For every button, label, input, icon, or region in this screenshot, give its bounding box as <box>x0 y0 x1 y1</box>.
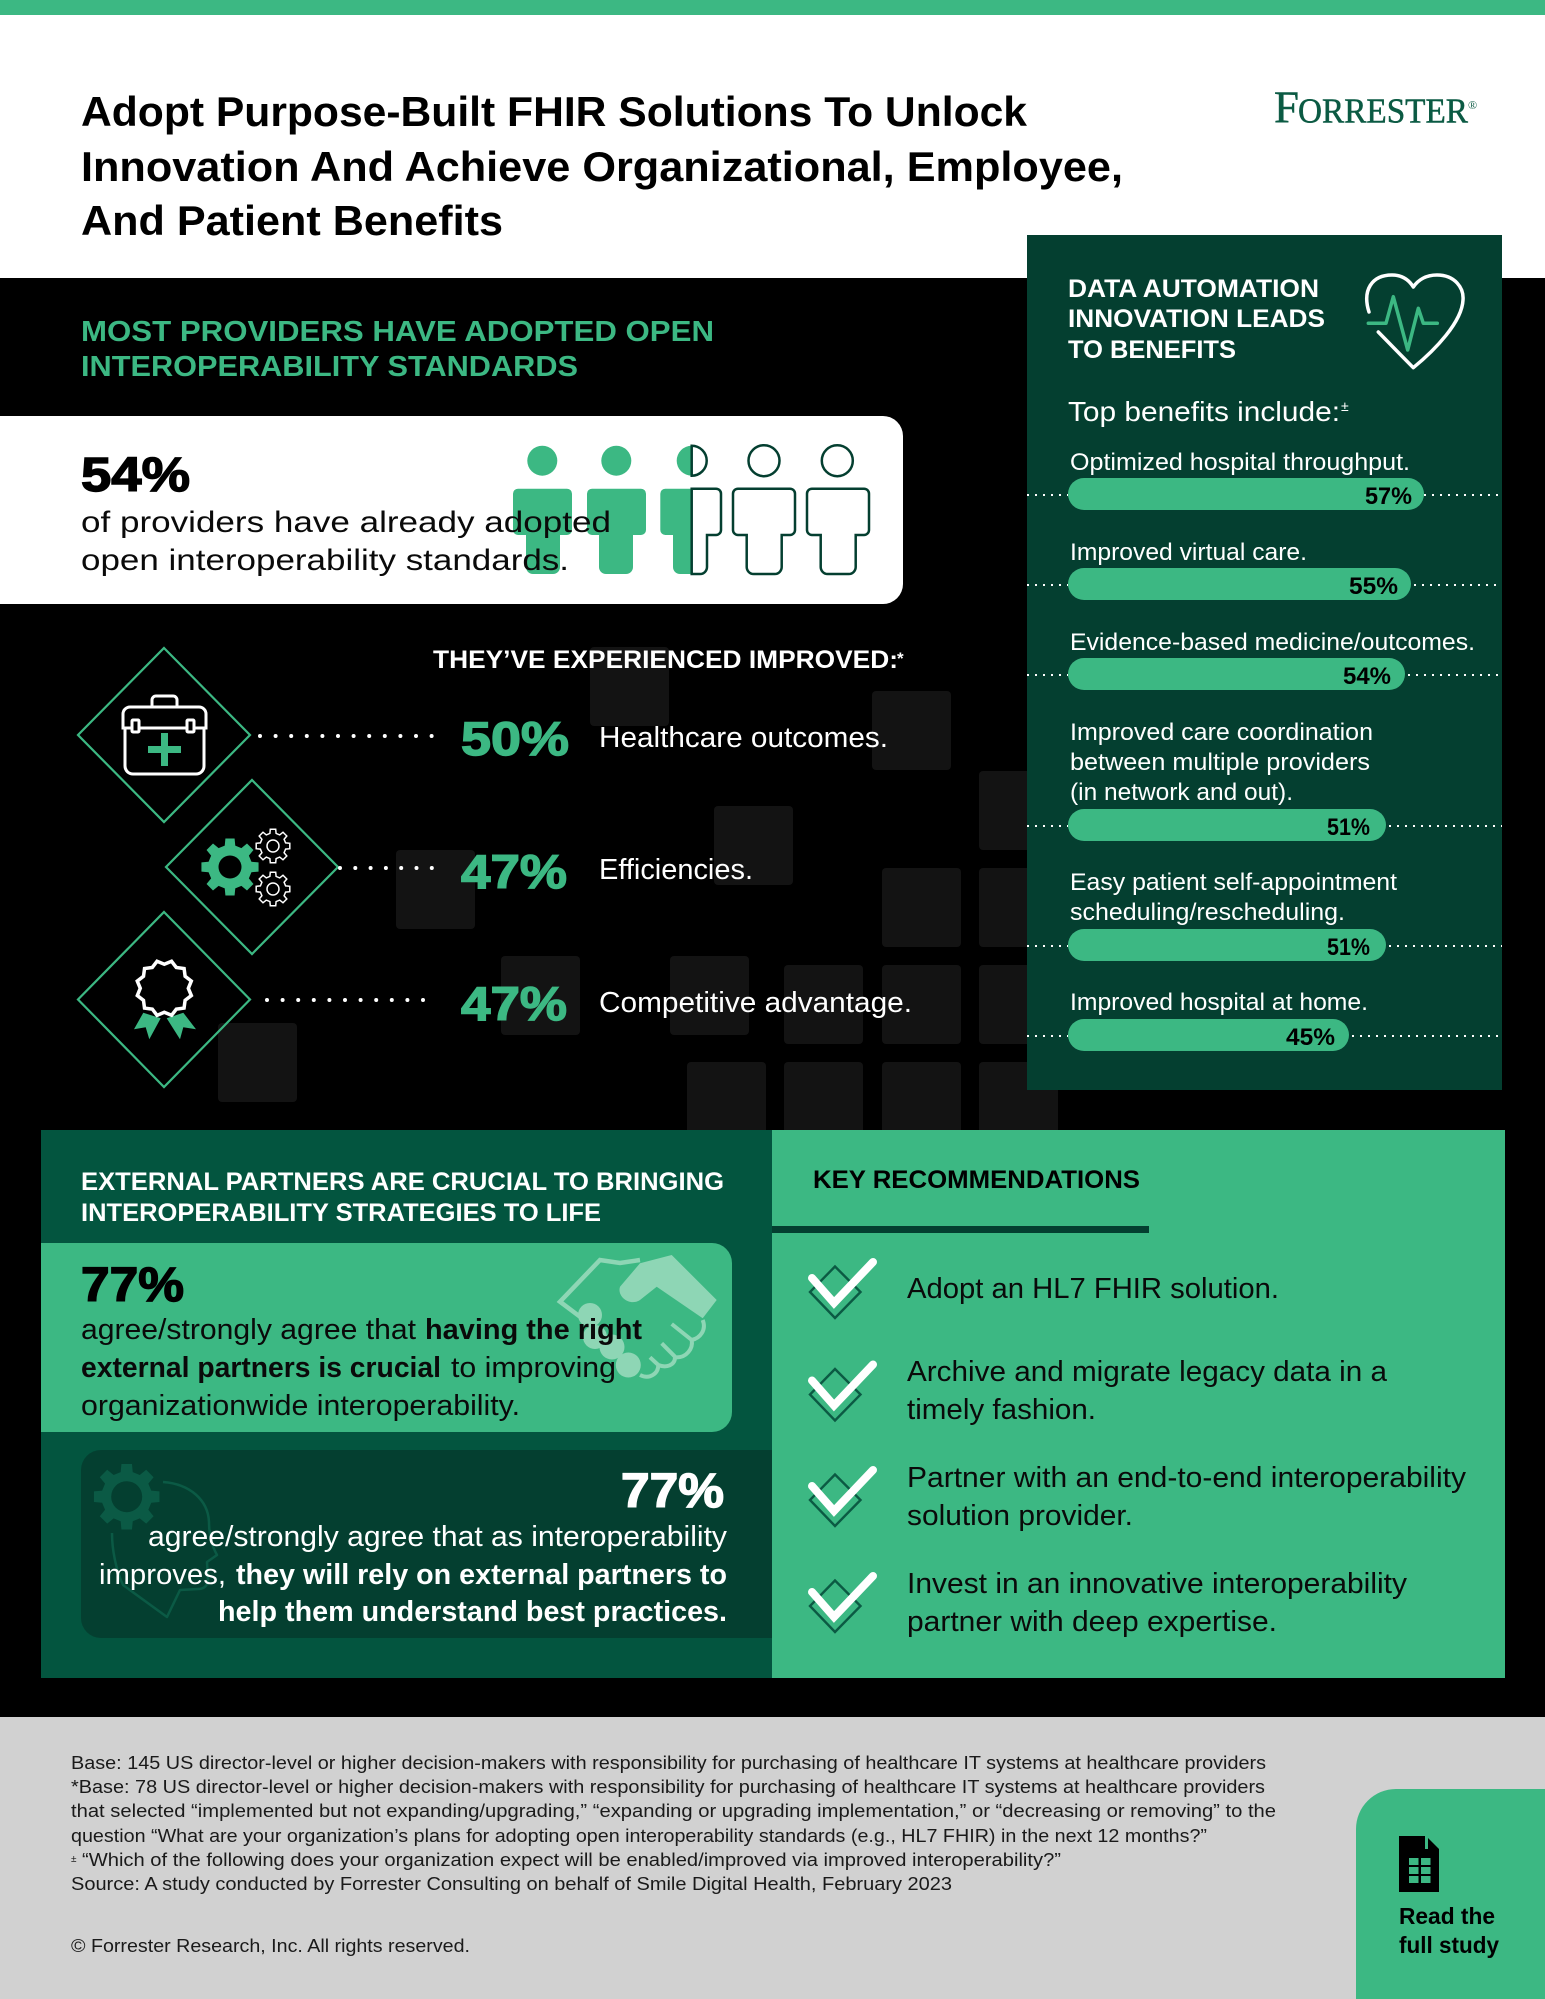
benefit: improved care coordination: 51% <box>1327 814 1370 841</box>
benefit: easy patient self-appointment <box>1027 869 1502 961</box>
icon: head with gear <box>94 1464 217 1617</box>
title: Innovation And Achieve Organizational, Employee, <box>81 143 1123 190</box>
panel: 54% adoption <box>0 416 903 604</box>
label: competitive advantage: Competitive advantage. <box>599 987 912 1019</box>
stat: 77%: 77% <box>81 1259 184 1312</box>
benefit: improved virtual care <box>1027 539 1502 600</box>
footnotes: question “What are your organization’s plans for adopting open interoperability standards (e.g., HL7 FHIR) in the next 12 months?” <box>71 1825 1207 1846</box>
logo: Forrester <box>1274 83 1477 133</box>
row: efficiencies <box>166 780 753 954</box>
title: And Patient Benefits <box>81 197 503 244</box>
recommendation: adopt HL7 FHIR <box>810 1262 1279 1318</box>
callout: right external partners <box>41 1243 732 1432</box>
text: partners crucial: to improving <box>451 1352 616 1384</box>
subheading: they've experienced improved: * <box>897 649 904 668</box>
benefit: improved hospital at home: 45% <box>1286 1024 1335 1051</box>
heading: data automation <box>1068 275 1325 364</box>
footnotes: *Base: 78 US director-level or higher decision-makers with responsibility for purchasing of healthcare IT systems at healthcare providers <box>71 1776 1265 1797</box>
label: healthcare outcomes: Healthcare outcomes. <box>599 722 888 754</box>
button: read the full study <box>1356 1789 1545 1999</box>
footnotes: that selected “implemented but not expanding/upgrading,” “expanding or upgrading implementation,” or “decreasing or removing” to the <box>71 1800 1276 1821</box>
heading: external partners: EXTERNAL PARTNERS ARE CRUCIAL TO BRINGING <box>81 1168 724 1196</box>
benefit: improved virtual care: Improved virtual care. <box>1070 539 1307 566</box>
footnotes: ± <box>71 1854 77 1865</box>
text: adoption statement: open interoperability standards. <box>81 544 569 577</box>
benefit: optimized hospital throughput: Optimized hospital throughput. <box>1070 449 1410 476</box>
benefit: easy patient self-appointment: scheduling/rescheduling. <box>1070 899 1345 926</box>
heading: key recommendations: KEY RECOMMENDATIONS <box>813 1166 1140 1194</box>
heading: external partners: INTEROPERABILITY STRATEGIES TO LIFE <box>81 1199 601 1227</box>
stat: 50%: 50% <box>461 712 569 765</box>
text: top benefits include: Top benefits include: <box>1068 396 1340 427</box>
panel: data automation benefits <box>1027 235 1502 1090</box>
recommendation: innovative partner: Invest in an innovative interoperability <box>907 1568 1408 1600</box>
callout: rely on partners <box>81 1450 773 1638</box>
benefit: optimized hospital throughput <box>1027 449 1502 510</box>
icon: gears in diamond <box>166 780 338 954</box>
footnotes: Base: 145 US director-level or higher decision-makers with responsibility for purchasing of healthcare IT systems at healthcare providers <box>71 1752 1266 1773</box>
heading: data automation: TO BENEFITS <box>1068 336 1236 364</box>
benefit: evidence-based medicine: Evidence-based medicine/outcomes. <box>1070 629 1475 656</box>
benefit: easy patient self-appointment: 51% <box>1327 934 1370 961</box>
benefit: improved care coordination: between multiple providers <box>1070 749 1370 776</box>
footnotes: Source: A study conducted by Forrester Consulting on behalf of Smile Digital Health, February 2023 <box>71 1873 952 1894</box>
heading: most providers: INTEROPERABILITY STANDARDS <box>81 351 578 383</box>
logo: Forrester: ® <box>1468 98 1477 112</box>
benefit: improved virtual care: 55% <box>1349 573 1398 600</box>
footnotes: “Which of the following does your organization expect will be enabled/improved via improved interoperability?” <box>82 1849 1061 1870</box>
text: adoption statement: of providers have already adopted <box>81 506 611 539</box>
recommendation: end-to-end partner: Partner with an end-to-end interoperability <box>907 1462 1467 1494</box>
text: adoption statement <box>81 506 611 577</box>
stat: 77%: 77% <box>621 1465 724 1518</box>
benefit: improved hospital at home <box>1027 989 1502 1051</box>
text: rely on external partners: improves, <box>99 1559 226 1591</box>
copyright: © Forrester Research, Inc. All rights reserved. <box>71 1935 470 1956</box>
heading: most providers <box>81 316 714 383</box>
icon: document <box>1399 1836 1439 1892</box>
recommendation: archive and migrate <box>810 1356 1388 1426</box>
text: partners crucial: organizationwide interoperability. <box>81 1390 520 1422</box>
benefit: improved care coordination <box>1027 719 1502 841</box>
title: Adopt Purpose-Built FHIR Solutions To Unlock <box>81 88 1028 135</box>
benefit: improved care coordination: (in network and out). <box>1070 779 1293 806</box>
footnotes <box>71 1752 1276 1894</box>
recommendation: adopt HL7 FHIR: Adopt an HL7 FHIR solution. <box>907 1273 1279 1305</box>
stat: 47%: 47% <box>461 845 567 898</box>
benefit: evidence-based medicine: 54% <box>1343 663 1391 690</box>
subheading: they've experienced improved: THEY’VE EXPERIENCED IMPROVED: <box>433 646 898 674</box>
icon: handshake <box>560 1255 717 1378</box>
dotted connector <box>260 734 434 738</box>
heading: data automation: DATA AUTOMATION <box>1068 275 1319 303</box>
heading: data automation: INNOVATION LEADS <box>1068 305 1325 333</box>
recommendation: archive and migrate: timely fashion. <box>907 1394 1096 1426</box>
panel: external partners <box>41 1130 773 1678</box>
benefit: easy patient self-appointment: Easy patient self-appointment <box>1070 869 1397 896</box>
button: read the full study: Read the <box>1399 1903 1495 1929</box>
text: rely on external partners: agree/strongly agree that as interoperability <box>148 1521 728 1553</box>
text: partners crucial: having the right <box>425 1314 642 1346</box>
dotted connector <box>267 998 424 1002</box>
recommendation: end-to-end partner: solution provider. <box>907 1500 1133 1532</box>
recommendation: archive and migrate: Archive and migrate legacy data in a <box>907 1356 1388 1388</box>
recommendation: innovative partner <box>810 1568 1408 1638</box>
benefit: evidence-based medicine <box>1027 629 1502 690</box>
recommendation: innovative partner: partner with deep expertise. <box>907 1606 1277 1638</box>
logo: Forrester: F <box>1274 83 1299 133</box>
panel: key recommendations <box>772 1130 1505 1678</box>
text: partners crucial: agree/strongly agree that <box>81 1314 416 1346</box>
text: partners crucial <box>81 1314 642 1422</box>
benefit: improved care coordination: Improved care coordination <box>1070 719 1373 746</box>
row: healthcare outcomes <box>78 648 888 822</box>
benefit: improved hospital at home: Improved hospital at home. <box>1070 989 1368 1016</box>
text: rely on external partners <box>99 1521 728 1628</box>
icon: medical kit in diamond <box>78 648 250 822</box>
row: competitive advantage <box>78 912 912 1087</box>
stat: 54%: 54% <box>81 449 190 502</box>
label: efficiencies: Efficiencies. <box>599 854 753 886</box>
recommendation: end-to-end partner <box>810 1462 1467 1532</box>
dotted connector <box>340 866 432 870</box>
text: top benefits include: ± <box>1341 398 1349 414</box>
benefit: optimized hospital throughput: 57% <box>1365 483 1412 510</box>
title <box>81 88 1123 244</box>
icon: five people, 54% filled <box>513 445 869 574</box>
icon: award in diamond <box>78 912 250 1087</box>
logo: Forrester: ORRESTER <box>1298 92 1469 131</box>
stat: 47%: 47% <box>461 977 567 1030</box>
text: rely on external partners: they will rely on external partners to <box>236 1559 727 1591</box>
button: read the full study: full study <box>1399 1932 1499 1958</box>
heading: external partners <box>81 1168 724 1227</box>
icon: heart with pulse <box>1367 275 1463 368</box>
text: partners crucial: external partners is crucial <box>81 1352 441 1384</box>
heading: most providers: MOST PROVIDERS HAVE ADOPTED OPEN <box>81 316 714 348</box>
text: rely on external partners: help them understand best practices. <box>218 1596 727 1628</box>
